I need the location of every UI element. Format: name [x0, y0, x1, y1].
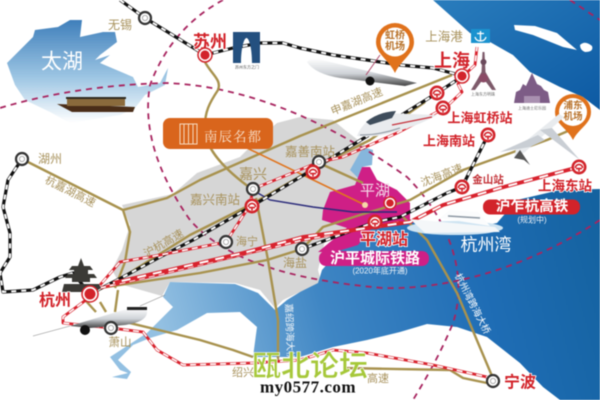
label: Ningbo: 宁波	[504, 372, 536, 392]
label: Hangzhou Bay: 杭州湾	[460, 236, 512, 254]
lake: Taihu	[7, 20, 168, 123]
label: expressway: 高速	[367, 371, 389, 385]
label: Shaoxing: 绍兴	[232, 365, 254, 379]
label: Shanghai Port: 上海港	[425, 29, 463, 44]
train	[357, 111, 437, 136]
landmark: Disney castle	[514, 73, 550, 103]
station: Haining	[220, 236, 232, 248]
highways	[22, 62, 575, 383]
landmark: Gate of the Orient: 苏州东方之门	[235, 64, 259, 70]
station: Jiashan grey	[313, 156, 325, 168]
station: Huzhou	[16, 153, 28, 165]
logo building icon	[180, 124, 197, 144]
station: Shanghai East	[572, 160, 586, 174]
note: planning: (规划中)	[517, 214, 547, 224]
red-white rail lines	[63, 47, 487, 377]
label: Huzhou: 湖州	[38, 151, 62, 166]
label: Jinshan Station: 金山站	[472, 173, 504, 186]
callout: Shanghai-Zhapu-Hangzhou HSR	[483, 197, 580, 215]
project dot	[362, 202, 368, 208]
pin: Pudong Airport	[555, 94, 591, 140]
station: Pinghu	[368, 214, 382, 230]
pin: Hongqiao Airport	[376, 23, 414, 73]
plane: Xiaoshan	[33, 295, 165, 336]
station: Shanghai Hongqiao	[436, 100, 450, 116]
label: Suzhou: 苏州	[193, 32, 227, 52]
island: Chongming	[514, 25, 592, 52]
label: Xiaoshan: 萧山	[108, 336, 132, 349]
sea: East China Sea north of Shanghai	[433, 0, 600, 110]
plane: Hongqiao	[307, 55, 417, 86]
label: Hangzhou: 杭州	[39, 290, 71, 310]
navy connector line	[256, 192, 397, 212]
label: Shenjiahu expressway: 申嘉湖高速	[329, 84, 385, 118]
label: Wuxi: 无锡	[108, 17, 132, 32]
watermark: forum name: 瓯北论坛	[252, 350, 368, 383]
landmark: Gate of the Orient	[233, 32, 260, 70]
label: Shanghai: 上海	[434, 51, 470, 71]
label: Haiyan: 海盐	[283, 255, 307, 270]
pin: Pudong Airport: 机场	[563, 110, 583, 122]
label: Shanghai East Station: 上海东站	[538, 178, 592, 194]
logo name: 南辰名都	[204, 128, 262, 144]
label: Jiaxing: 嘉兴	[239, 166, 267, 182]
landmark: Hangzhou pagoda	[62, 258, 101, 292]
label: Hangzhou Bay Bridge: 杭州湾跨海大桥	[452, 271, 493, 337]
label: Shanghai Hongqiao Station: 上海虹桥站	[447, 110, 513, 126]
label: Shenhai expressway: 沈海高速	[419, 161, 465, 189]
station: Pinghu city	[384, 197, 396, 209]
icon: port anchor	[471, 29, 490, 43]
station: Jiashan South	[306, 164, 320, 180]
boat	[57, 97, 135, 112]
label: Huhang expressway: 沪杭高速	[141, 226, 186, 260]
label: Haining: 海宁	[236, 234, 258, 248]
label: Jiashao Bay Bridge: 嘉绍跨海大桥	[283, 303, 297, 361]
landmark: Oriental Pearl Tower	[471, 52, 496, 90]
station: Jinshan	[454, 180, 470, 194]
connector: project to Pinghu	[247, 148, 365, 205]
label: Taihu: 太湖	[41, 50, 83, 74]
station: Jiaxing	[247, 183, 259, 195]
black-white rail lines	[0, 0, 488, 294]
pin: Hongqiao Airport: 机场	[385, 40, 405, 52]
station: Haiyan	[296, 243, 308, 255]
watermark: url: my0577.com	[260, 378, 356, 396]
landmark captions	[471, 90, 546, 110]
station: Shanghai South	[480, 128, 496, 142]
station: Suzhou	[198, 48, 212, 62]
label: Pinghu: 平湖	[360, 182, 390, 200]
pin: Hongqiao Airport: 虹桥	[385, 28, 405, 42]
sea: Hangzhou Bay with Qiantang estuary	[110, 189, 600, 400]
note: 2020 opening: (2020年底开通)	[352, 266, 408, 276]
inlet near Pinghu	[350, 147, 373, 178]
plane: Pudong	[500, 114, 580, 165]
station: Shanghai	[455, 69, 469, 83]
station: Xiaoshan	[105, 322, 117, 334]
station: Ningbo	[487, 375, 499, 387]
label: Pinghu Station: 平湖站	[360, 230, 408, 248]
station: Shanghai mainline 1	[430, 86, 444, 100]
landmark captions: 上海迪士尼乐园	[518, 104, 546, 110]
label: Jiashan South Station: 嘉善南站	[285, 144, 335, 159]
station: Jiaxing South	[244, 198, 260, 214]
callout: Shanghai-Zhapu-Hangzhou HSR: 沪乍杭高铁	[496, 197, 569, 215]
high-speed rail: Shanghai-Zhapu-Hangzhou	[113, 167, 579, 283]
ship	[407, 210, 503, 235]
station: Wuxi	[139, 12, 151, 24]
label: Jiaxing South Station: 嘉兴南站	[190, 192, 240, 207]
label: Hangjiahu expressway: 杭嘉湖高速	[43, 172, 98, 210]
label: Shanghai South Station: 上海南站	[423, 134, 475, 148]
grey land: Jiaxing region	[112, 117, 400, 308]
callout: Shanghai-Pinghu intercity railway: 沪平城际铁路	[330, 249, 420, 267]
pink region: Pinghu	[318, 167, 410, 252]
landmark captions: 上海东方明珠	[471, 90, 495, 96]
station: Hangzhou	[82, 286, 98, 302]
logo panel: Nanchen Mingdu	[163, 118, 273, 149]
pin: Pudong Airport: 浦东	[563, 100, 583, 112]
